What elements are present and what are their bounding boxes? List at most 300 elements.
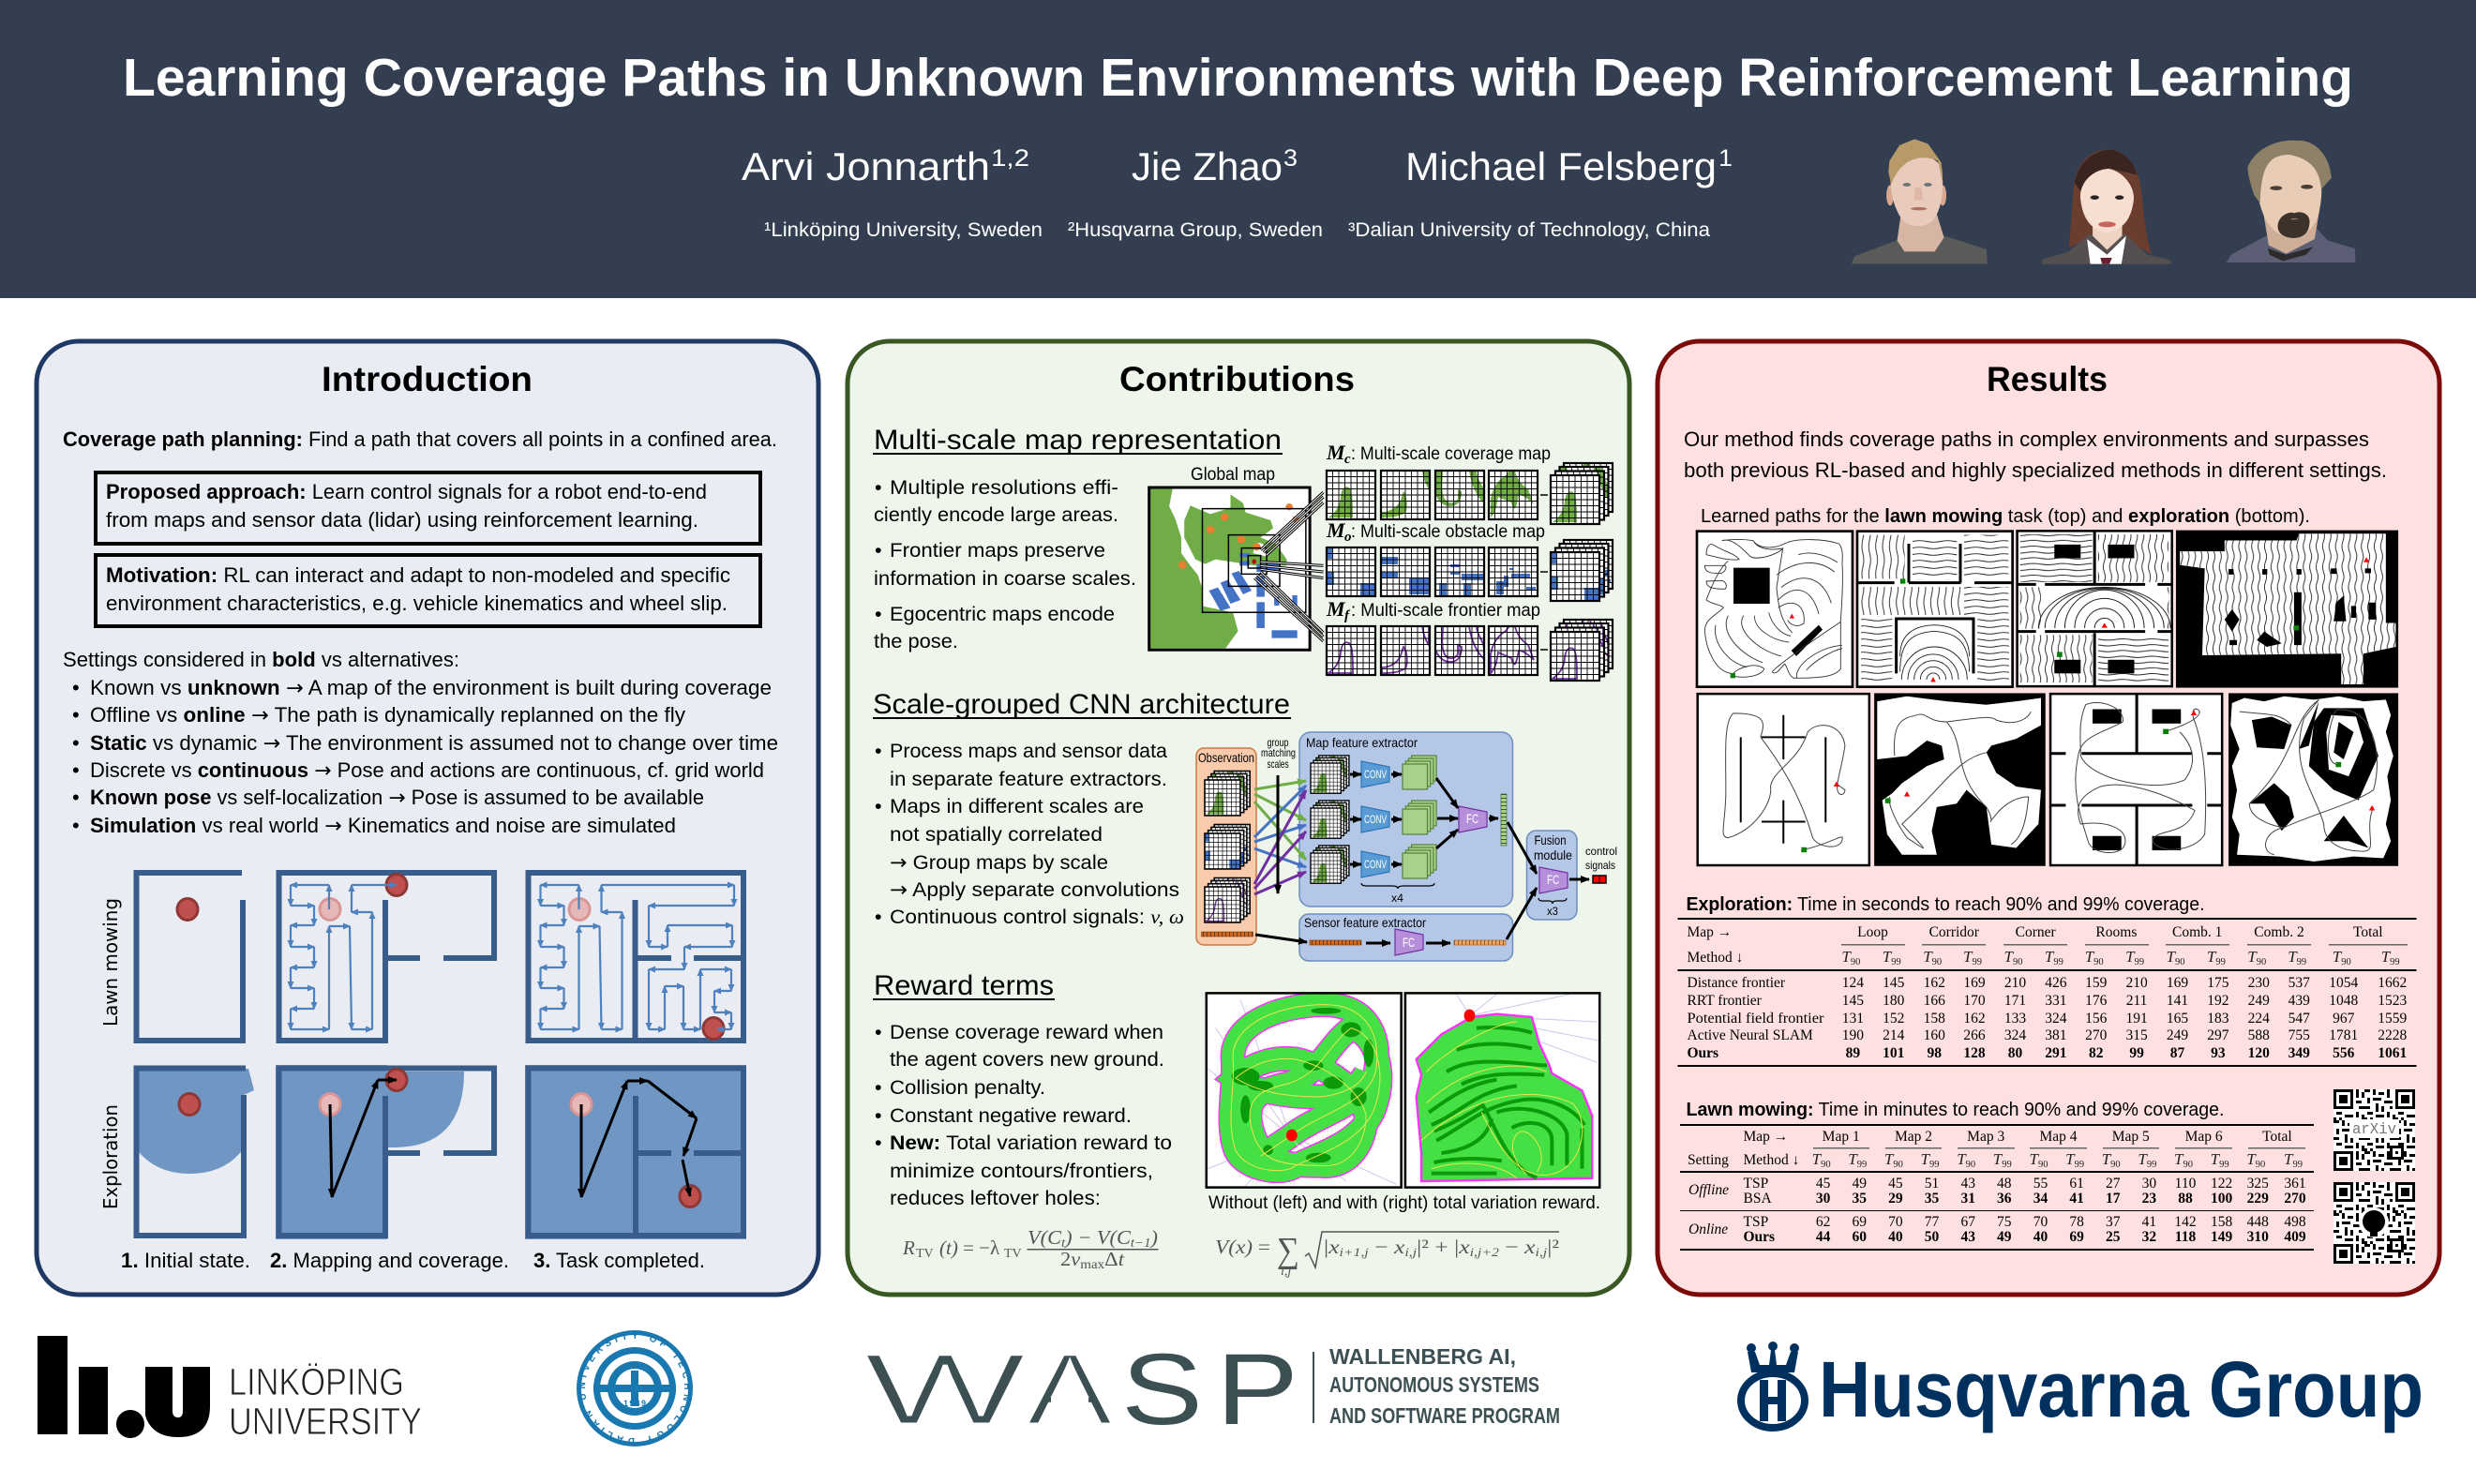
label: exploration row: Exploration [99,1104,122,1209]
arrows: data flow [1255,774,1589,943]
table: exploration times: 99 [2135,957,2144,967]
formula: total variation definition: i,j+2 [1470,1245,1500,1259]
text: settings list: • [72,676,80,699]
logo: Linköping University: LINKÖPING [229,1360,404,1403]
table: lawn mowing times: 70 [2033,1214,2048,1230]
text: multi-scale bullets: ciently encode large areas. [874,503,1118,526]
formula: total variation reward: TV [916,1247,934,1261]
photo: Jie Zhao [2042,150,2171,264]
table: exploration times: 556 [2333,1045,2355,1061]
block: observation [1196,748,1256,945]
title: Learning Coverage Paths in Unknown Environments with Deep Reinforcement Learning [123,48,2353,108]
table: exploration times: 755 [2288,1027,2310,1043]
text: settings list: • [72,814,80,837]
table: exploration times: 426 [2045,975,2067,991]
table: exploration times: 2228 [2378,1027,2407,1043]
authors: 1,2 [991,145,1029,172]
table: exploration times: T [1883,948,1893,966]
table: exploration times: 162 [1924,975,1945,991]
table: exploration times: 297 [2207,1027,2229,1043]
map tiles: coverage [1327,463,1613,524]
text: settings list: Settings considered in bold vs alternatives: [63,648,459,671]
table: lawn mowing times: 29 [1888,1191,1903,1207]
table: exploration times: 170 [1963,993,1986,1009]
map 1 [1697,532,1853,687]
table: exploration times: 190 [1842,1027,1864,1043]
table: lawn mowing times: 45 [1888,1176,1903,1192]
table: exploration times: 224 [2248,1011,2270,1027]
block: map feature extractor: CONV [1364,858,1387,871]
table: lawn mowing times: 122 [2211,1176,2232,1192]
box: proposed approach [96,472,760,544]
map 2 [1857,532,2013,687]
table: lawn mowing times: 158 [2211,1214,2232,1230]
table: exploration times: 588 [2248,1027,2270,1043]
text: reward bullets: minimize contours/frontiers, [890,1160,1153,1182]
caption: learned paths: Learned paths for the lawn mowing task (top) and exploration (bottom). [1701,506,2310,527]
table: lawn mowing times: 99 [2219,1160,2229,1170]
box: proposed approach: from maps and sensor data (lidar) using reinforcement learning. [106,508,698,532]
QR code: arXiv: arXiv [2352,1121,2396,1139]
map 8 [2228,693,2398,866]
text: CNN bullets: in separate feature extractors. [890,768,1167,790]
map 6 [1874,693,2046,866]
diagram: exploration initial state [136,1069,254,1236]
table: lawn mowing times: T [2284,1150,2294,1168]
table: exploration times: 381 [2045,1027,2067,1043]
table: exploration times: T [2085,948,2095,966]
authors: 1 [1718,145,1733,172]
table: exploration times: 1559 [2378,1011,2407,1027]
text: reward bullets: • [875,1104,882,1127]
table: lawn mowing times: 30 [2142,1176,2156,1192]
formula: total variation reward: 2v [1060,1248,1080,1270]
map label: coverage: : Multi-scale coverage map [1351,444,1551,464]
table: exploration times: 90 [2175,957,2184,967]
logo: WASP: S [1121,1332,1203,1446]
map label: obstacle [1326,518,1545,545]
table: exploration times: RRT frontier [1688,993,1763,1009]
map label: obstacle: : Multi-scale obstacle map [1351,522,1545,542]
logo: Linköping University [38,1336,422,1443]
text: results summary: both previous RL-based and highly specialized methods in different settings. [1684,458,2387,482]
table: exploration times: 191 [2125,1011,2148,1027]
table caption: exploration: Exploration: Time in seconds to reach 90% and 99% coverage. [1686,893,2205,915]
table: lawn mowing times: 70 [1888,1214,1903,1230]
table: exploration times: 90 [2257,957,2266,967]
diagram: CNN architecture [1196,732,1617,961]
table: lawn mowing times: 90 [1966,1160,1975,1170]
text: settings list: • [72,758,80,782]
figure: coverage without total variation reward [1207,993,1402,1188]
table: exploration times: 145 [1883,975,1905,991]
label: group matching scales: matching [1261,746,1296,759]
table: lawn mowing times: 51 [1925,1176,1939,1192]
text: multi-scale bullets [874,476,1136,652]
table: lawn mowing times: 41 [2069,1191,2084,1207]
text: reward bullets: Dense coverage reward when [890,1021,1163,1043]
text: reward bullets [875,1021,1172,1209]
table caption: lawn mowing: Lawn mowing: Time in minutes to reach 90% and 99% coverage. [1686,1099,2224,1120]
block: map feature extractor: FC [1466,811,1478,826]
formula: total variation reward: Δ [1104,1248,1118,1270]
text: settings list: Static vs dynamic → The environment is assumed not to change over time [90,731,778,756]
table: lawn mowing times: Map 3 [1967,1129,2004,1145]
formula: total variation definition: − [1369,1236,1394,1258]
text: reward bullets: • [875,1132,882,1154]
table: lawn mowing times: 69 [1853,1214,1867,1230]
table: exploration times: 99 [1891,957,1901,967]
header banner [0,0,2476,298]
remaining maps [1698,531,2398,866]
table: exploration times: 82 [2089,1045,2104,1061]
table: lawn mowing times: 498 [2284,1214,2306,1230]
table: lawn mowing times: 40 [2033,1229,2048,1245]
table: lawn mowing times: 142 [2174,1214,2197,1230]
map 7 [2050,694,2222,865]
affiliations: ²Husqvarna Group, Sweden [1068,219,1323,241]
text: settings list: Discrete vs continuous → Pose and actions are continuous, cf. grid world [90,758,764,783]
subheading: scale-grouped CNN architecture: Scale-grouped CNN architecture [873,689,1290,720]
logo: Husqvarna Group: Husqvarna Group [1819,1345,2423,1433]
table: lawn mowing times: 325 [2247,1176,2269,1192]
logo: Dalian University of Technology: 1949 [623,1399,646,1408]
authors: Michael Felsberg [1405,144,1717,188]
table: lawn mowing times: 270 [2284,1191,2306,1207]
table: lawn mowing times: 31 [1960,1191,1975,1207]
text: multi-scale bullets: Egocentric maps encode [890,603,1115,625]
formula: total variation reward: t−1 [1131,1237,1151,1251]
table: exploration times: 165 [2167,1011,2188,1027]
block: map feature extractor [1299,732,1513,907]
table: lawn mowing times: 409 [2284,1229,2306,1245]
table: lawn mowing times: 99 [1929,1160,1939,1170]
table: lawn mowing times: 99 [2147,1160,2156,1170]
table: exploration times: Comb. 2 [2254,924,2304,940]
table: exploration times: 159 [2085,975,2108,991]
table: lawn mowing times: T [2029,1150,2040,1168]
text: CNN bullets: Maps in different scales are [890,795,1144,817]
table: exploration times: Distance frontier [1688,975,1786,991]
subheading: multi-scale map representation: Multi-scale map representation [874,425,1282,456]
table: lawn mowing times: Map → [1744,1129,1788,1145]
formula: total variation definition: |x [1324,1236,1337,1258]
table: exploration times: 120 [2248,1045,2270,1061]
text: CNN bullets: Process maps and sensor data [890,740,1167,762]
affiliations: ³Dalian University of Technology, China [1348,219,1710,241]
table: exploration times: 180 [1883,993,1905,1009]
table: lawn mowing times: 229 [2247,1191,2269,1207]
authors: 3 [1283,145,1298,172]
table: exploration times: 145 [1842,993,1864,1009]
table: exploration times: 90 [2013,957,2022,967]
table: exploration times: 1061 [2378,1045,2407,1061]
map label: frontier: M [1326,597,1346,621]
table: exploration times: T [2125,948,2136,966]
table: exploration times: 192 [2207,993,2229,1009]
arrows: group matching connections [1254,781,1306,894]
formula: total variation reward: (t) = −λ [939,1237,1000,1259]
text: results summary: Our method finds coverage paths in complex environments and surpasses [1684,427,2369,451]
text: settings list [63,648,778,838]
table: exploration times: 90 [2341,957,2351,967]
block: fusion module: x3 [1547,905,1558,918]
text: coverage path planning definition: Coverage path planning: Find a path that covers all points in a confined area. [63,427,777,451]
table: lawn mowing times [1680,1124,2314,1251]
table: lawn mowing times: 90 [1821,1160,1831,1170]
table: exploration times: 349 [2288,1045,2310,1061]
text: CNN bullets: → Group maps by scale [890,851,1108,875]
map label: frontier: f [1344,608,1351,623]
table: exploration times: 315 [2125,1027,2148,1043]
table: exploration times: T [1841,948,1852,966]
text: multi-scale bullets: Frontier maps preserve [890,539,1105,562]
captions: diagram steps: 1. Initial state. [121,1249,250,1272]
table: exploration times: Potential field frontier [1688,1011,1824,1027]
label: lawn mowing row: Lawn mowing [99,898,122,1027]
table: exploration times: 99 [2297,957,2306,967]
table: exploration times: 124 [1842,975,1864,991]
table: lawn mowing times: Map 6 [2185,1129,2223,1145]
table: exploration times: T [1923,948,1933,966]
table: lawn mowing times: 62 [1816,1214,1830,1230]
table: lawn mowing times: T [1993,1150,2003,1168]
table: lawn mowing times: 45 [1816,1176,1831,1192]
formula: total variation reward: R [902,1237,915,1259]
formula: total variation reward [902,1226,1159,1272]
formula: total variation definition: x [1458,1236,1470,1258]
text: settings list: • [72,703,80,727]
text: multi-scale bullets: information in coarse scales. [874,567,1136,590]
table: lawn mowing times: 100 [2211,1191,2232,1207]
diagram: lawn mowing mapping and coverage [279,873,494,1041]
table: exploration times: 101 [1883,1045,1904,1061]
formula: total variation reward: ) [1149,1226,1158,1249]
table: lawn mowing times: 110 [2175,1176,2197,1192]
table: lawn mowing times: 69 [2069,1229,2084,1245]
table: lawn mowing times: Map 5 [2112,1129,2150,1145]
table: exploration times: T [2004,948,2014,966]
map tiles: frontier [1327,620,1613,681]
table: lawn mowing times: T [2246,1150,2257,1168]
text: reward bullets: • [875,1021,882,1043]
formula: total variation definition: i+1,j [1339,1245,1369,1259]
text: CNN bullets: • [875,795,882,817]
block: fusion module: module [1534,847,1572,862]
label: group matching scales: scales [1268,757,1288,771]
text: multi-scale bullets: • [875,476,882,499]
table: lawn mowing times: 27 [2106,1176,2121,1192]
map label: frontier: : Multi-scale frontier map [1351,601,1540,621]
table: exploration times: 152 [1883,1011,1904,1027]
table: lawn mowing times: Total [2262,1129,2292,1145]
table: exploration times: 214 [1883,1027,1905,1043]
table: lawn mowing times: 35 [1925,1191,1939,1207]
figure: lawn mowing and exploration paths [1697,531,2398,866]
text: CNN bullets: → Apply separate convolutions [890,878,1179,902]
captions: diagram steps [121,1249,705,1272]
table: exploration times: 99 [2129,1045,2144,1061]
table: exploration times: Map → [1688,924,1732,940]
logo: WASP [863,1332,1560,1446]
table: exploration times: 537 [2288,975,2310,991]
table: exploration times: 1054 [2329,975,2359,991]
table: lawn mowing times: 48 [1997,1176,2012,1192]
table: exploration times: 1048 [2329,993,2359,1009]
heading: results: Results [1987,360,2108,398]
table: lawn mowing times: 67 [1960,1214,1975,1230]
table: exploration times: 249 [2167,1027,2188,1043]
table: exploration times: 99 [2215,957,2226,967]
panel: contributions [848,341,1629,1295]
table: lawn mowing times: 41 [2142,1214,2156,1230]
logo: Linköping University: UNIVERSITY [229,1400,422,1443]
label: group matching scales [1261,736,1296,771]
table: exploration times: 128 [1963,1045,1986,1061]
table: lawn mowing times: 55 [2033,1176,2048,1192]
table: exploration times: 183 [2207,1011,2229,1027]
table: exploration times: Comb. 1 [2172,924,2222,940]
table: lawn mowing times: T [1812,1150,1823,1168]
subheading: reward terms: Reward terms [874,970,1054,1001]
table: lawn mowing times: 75 [1997,1214,2012,1230]
text: multi-scale bullets: • [875,603,882,625]
table: exploration times: 175 [2207,975,2229,991]
table: exploration times: 1523 [2378,993,2407,1009]
table: exploration times: 87 [2170,1045,2184,1061]
logo: WASP: AUTONOMOUS SYSTEMS [1329,1372,1539,1397]
map label: coverage: c [1344,452,1351,467]
table: lawn mowing times: 37 [2106,1214,2121,1230]
map 4 [2176,531,2398,688]
map label: obstacle: M [1326,518,1346,542]
table: lawn mowing times: 32 [2142,1229,2156,1245]
table: lawn mowing times: 35 [1853,1191,1867,1207]
formula: total variation definition: x [1523,1236,1536,1258]
table: exploration times: T [1963,948,1973,966]
map label: frontier [1326,597,1540,623]
output: control signals: control [1585,845,1617,858]
table: exploration times: 211 [2126,993,2147,1009]
table: lawn mowing times: T [2174,1150,2184,1168]
output: control signals: signals [1585,859,1615,872]
table: lawn mowing times: 40 [1888,1229,1903,1245]
table: lawn mowing times: 90 [2110,1160,2121,1170]
table: lawn mowing times: T [2211,1150,2221,1168]
figure: coverage with total variation reward [1405,993,1599,1188]
formula: total variation definition: i,j [1281,1265,1291,1279]
box: motivation: environment characteristics, e.g. vehicle kinematics and wheel slip. [106,592,728,615]
QR code: arXiv [2333,1089,2415,1171]
table: exploration times: 547 [2288,1011,2310,1027]
table: exploration times: 141 [2167,993,2188,1009]
table: exploration times: 98 [1927,1045,1942,1061]
table: exploration times: Rooms [2095,924,2137,940]
table: exploration times: 210 [2125,975,2148,991]
table: exploration times: 93 [2211,1045,2226,1061]
table: lawn mowing times: Ours [1744,1229,1775,1245]
table: lawn mowing times: TSP [1744,1214,1768,1230]
text: reward bullets: the agent covers new ground. [890,1048,1164,1071]
table: exploration times: 90 [1851,957,1860,967]
text: results summary [1684,427,2387,482]
table: exploration times: Method ↓ [1688,950,1743,966]
map 5 [1698,694,1869,865]
table: lawn mowing times: 88 [2178,1191,2193,1207]
formula: total variation reward: V(C [1028,1226,1059,1249]
box: proposed approach: Proposed approach: Learn control signals for a robot end-to-end [106,480,707,503]
logo: Dalian University of Technology: DALIAN UNIVERSITY OF TECHNOLOGY [581,1335,688,1442]
table: lawn mowing times: 99 [1857,1160,1867,1170]
table: exploration times: 80 [2008,1045,2023,1061]
table: exploration times: T [2247,948,2258,966]
table: exploration times: 230 [2248,975,2270,991]
table: exploration times: 160 [1924,1027,1945,1043]
heading: introduction: Introduction [322,360,533,398]
table: lawn mowing times: 49 [1997,1229,2012,1245]
authors: Arvi Jonnarth [742,144,990,188]
block: map feature extractor: CONV [1364,813,1387,826]
label: group matching scales: group [1268,736,1289,749]
table: lawn mowing times: 50 [1925,1229,1939,1245]
text: multi-scale bullets: Multiple resolutions effi- [890,476,1118,499]
QR code: GitHub [2333,1182,2415,1264]
caption: total variation comparison: Without (left) and with (right) total variation reward. [1208,1193,1600,1213]
table: exploration times: 156 [2085,1011,2108,1027]
table: exploration times: 162 [1963,1011,1986,1027]
text: CNN bullets: • [875,740,882,762]
table: exploration times: T [2166,948,2177,966]
table: lawn mowing times: 90 [1893,1160,1903,1170]
text: settings list: Simulation vs real world → Kinematics and noise are simulated [90,814,676,838]
table: exploration times: 1662 [2378,975,2407,991]
diagram: lawn mowing task completed [529,873,743,1041]
table: lawn mowing times: T [1920,1150,1931,1168]
block: fusion module: Fusion [1534,832,1566,847]
table: exploration times: 99 [2390,957,2400,967]
authors: Jie Zhao [1132,144,1283,188]
table: lawn mowing times: 99 [2002,1160,2012,1170]
table: lawn mowing times: 25 [2106,1229,2121,1245]
table: exploration times: 967 [2333,1011,2355,1027]
map tiles: obstacle [1327,540,1613,601]
table: exploration times: 1781 [2329,1027,2358,1043]
table: lawn mowing times: 310 [2247,1229,2269,1245]
table: lawn mowing times: 99 [2075,1160,2084,1170]
table: lawn mowing times: 78 [2069,1214,2084,1230]
table: exploration times: T [2333,948,2343,966]
diagram: exploration mapping and coverage [276,1065,494,1239]
formula: total variation reward: t [1061,1237,1066,1251]
formula: total variation definition [1215,1231,1559,1279]
table: exploration times: 90 [1932,957,1942,967]
table: exploration times: Corridor [1929,924,1980,940]
captions: diagram steps: 2. Mapping and coverage. [270,1249,509,1272]
block: sensor feature extractor: FC [1403,935,1415,950]
table: lawn mowing times: 90 [2038,1160,2048,1170]
diagram: lawn mowing initial state [137,873,243,1041]
text: reward bullets: New: Total variation reward to [890,1132,1172,1154]
table: lawn mowing times: Map 4 [2039,1129,2078,1145]
table: lawn mowing times: BSA [1744,1191,1772,1207]
table: exploration times: 324 [2045,1011,2067,1027]
table: exploration times: 249 [2248,993,2270,1009]
table: lawn mowing times: 77 [1925,1214,1939,1230]
formula: total variation definition: ∑ [1277,1231,1299,1270]
table: lawn mowing times: Offline [1688,1182,1729,1198]
table: exploration times: 90 [2093,957,2104,967]
block: map feature extractor: x4 [1391,892,1403,905]
